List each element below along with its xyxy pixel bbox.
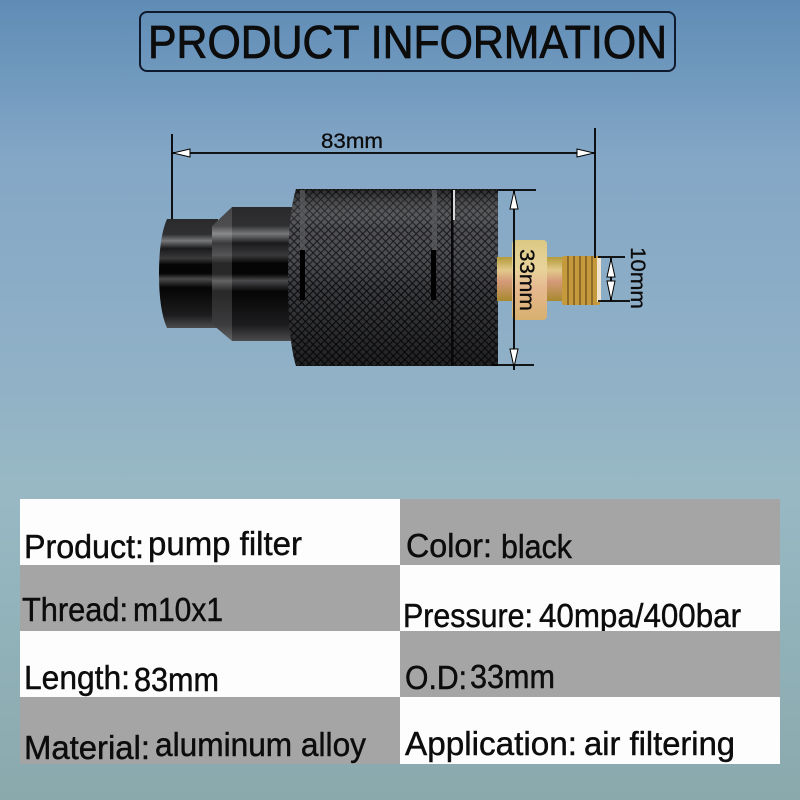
row 2 left: thread: m10x1 xyxy=(133,591,223,628)
row 2 right: pressure: Pressure: xyxy=(403,597,533,634)
knurled body xyxy=(288,189,498,366)
row 4 left: material: Material: xyxy=(24,729,150,766)
row 2 right: pressure xyxy=(400,565,780,634)
row 3 right: outer diameter xyxy=(400,631,780,697)
row 1 left: product: pump filter xyxy=(148,525,302,562)
dimension: length 83mm: 83mm xyxy=(321,130,383,153)
row 2 left: thread xyxy=(20,565,400,631)
title: PRODUCT INFORMATION xyxy=(148,16,667,68)
dimension: diameter 33mm xyxy=(492,190,538,370)
row 3 right: outer diameter: O.D: xyxy=(405,659,467,696)
row 2 left: thread: Thread: xyxy=(22,591,128,628)
row 4 left: material: aluminum alloy xyxy=(155,726,366,763)
product illustration: pump filter xyxy=(159,189,601,366)
dimension: length 83mm xyxy=(172,128,595,258)
row 1 right: color: black xyxy=(501,528,572,565)
row 4 right: application: air filtering xyxy=(584,725,735,762)
row 3 right: outer diameter: 33mm xyxy=(470,658,555,695)
dimension: thread 10mm xyxy=(598,247,649,309)
row 3 left: length xyxy=(20,631,400,698)
step highlight xyxy=(212,207,232,341)
brass nut xyxy=(512,240,547,320)
specification table xyxy=(20,499,780,766)
dimension: thread 10mm: 10mm xyxy=(626,247,649,309)
dimension: diameter 33mm: 33mm xyxy=(515,249,538,311)
row 3 left: length: 83mm xyxy=(134,661,219,698)
row 1 left: product: Product: xyxy=(24,528,144,565)
body shading and grooves xyxy=(288,189,498,366)
row 4 left: material xyxy=(20,697,400,766)
brass thread xyxy=(562,256,601,305)
front cylinder xyxy=(159,219,218,328)
brass stem xyxy=(497,257,565,301)
row 3 left: length: Length: xyxy=(24,659,130,696)
row 4 right: application: Application: xyxy=(405,725,577,762)
middle cylinder xyxy=(212,207,292,341)
row 4 right: application xyxy=(400,697,780,764)
row 1 right: color: Color: xyxy=(406,527,492,564)
row 1 left: product xyxy=(20,499,400,565)
row 1 right: color xyxy=(400,499,780,565)
row 2 right: pressure: 40mpa/400bar xyxy=(539,597,741,634)
